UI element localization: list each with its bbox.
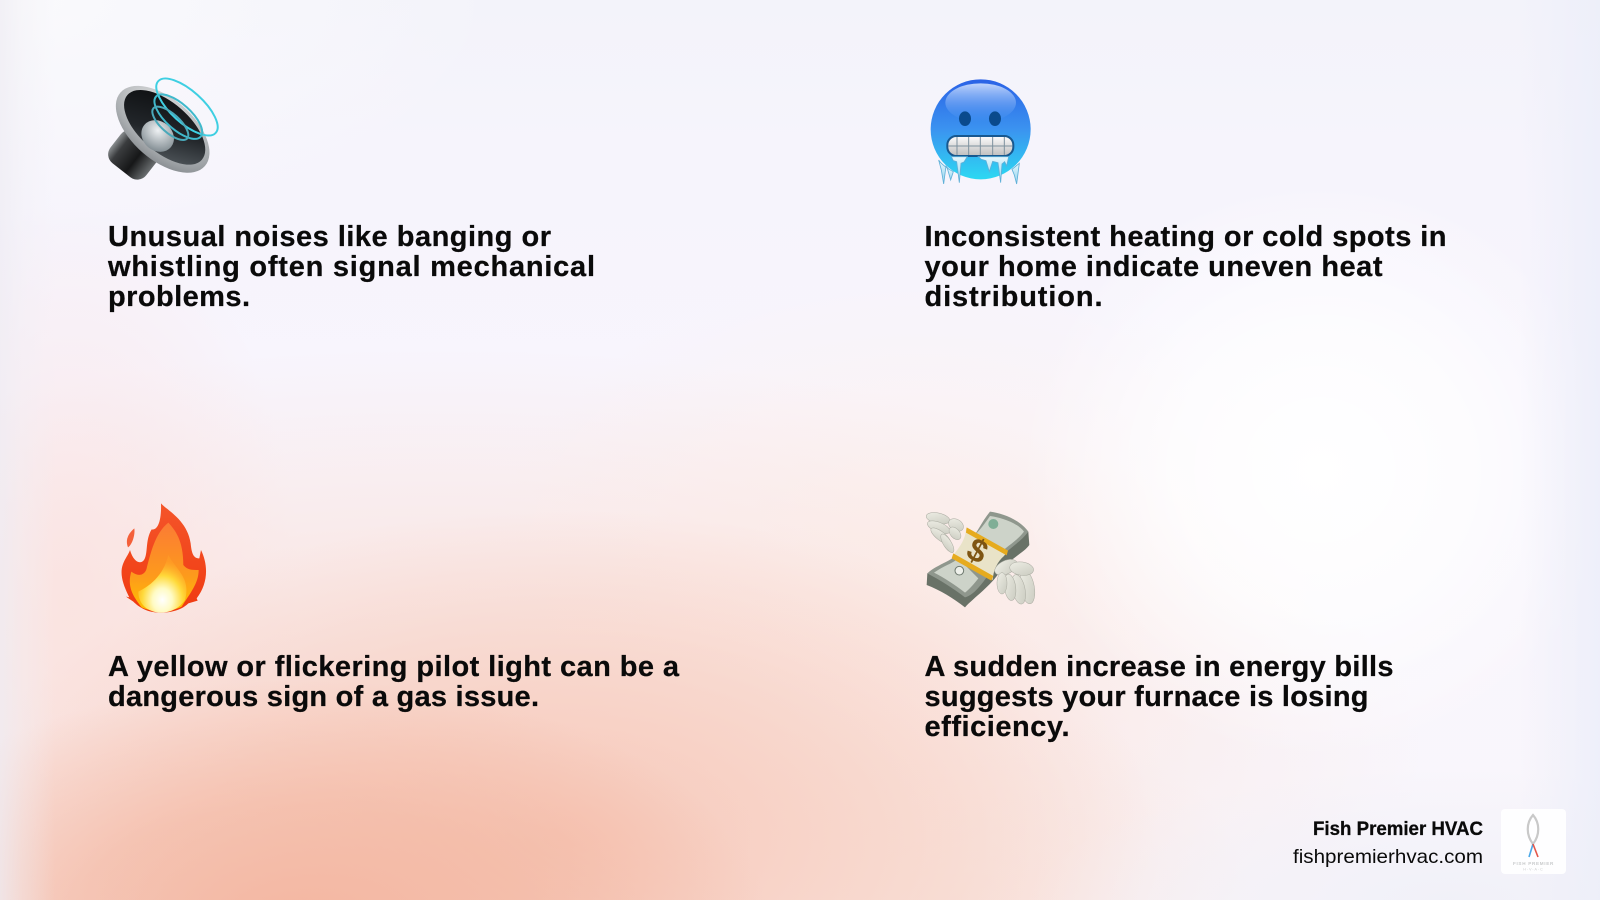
footer: brand name and website: Fish Premier HVAC	[1313, 819, 1483, 840]
panel: energy bills	[924, 511, 1394, 743]
icon: flame	[122, 503, 206, 613]
icon: money with wings: $	[961, 530, 994, 571]
text: unusual noises: whistling often signal mechanical	[107, 251, 595, 283]
logo: Fish Premier HVAC: H-V-A-C	[1523, 868, 1544, 872]
footer: brand name and website	[1293, 819, 1483, 868]
text: pilot light: dangerous sign of a gas issue.	[108, 681, 539, 713]
text: pilot light: A yellow or flickering pilot light can be a	[108, 651, 680, 683]
text: inconsistent heating	[924, 221, 1446, 313]
icon: money with wings	[925, 511, 1037, 607]
text: energy bills: efficiency.	[924, 711, 1070, 743]
text: unusual noises	[107, 221, 595, 313]
icon: speaker	[100, 69, 226, 189]
logo: Fish Premier HVAC: FISH PREMIER	[1513, 861, 1554, 866]
panel: pilot light	[108, 503, 680, 713]
footer: brand name and website: fishpremierhvac.com	[1293, 846, 1483, 868]
text: unusual noises: Unusual noises like banging or	[108, 221, 551, 253]
text: inconsistent heating: your home indicate uneven heat	[924, 251, 1383, 283]
panel: inconsistent heating	[924, 79, 1446, 313]
panel: unusual noises	[100, 69, 595, 313]
text: inconsistent heating: distribution.	[924, 281, 1102, 313]
text: energy bills	[924, 651, 1394, 743]
icon: freezing face	[931, 79, 1031, 184]
logo: Fish Premier HVAC	[1501, 809, 1566, 874]
text: energy bills: suggests your furnace is losing	[924, 681, 1368, 713]
text: pilot light	[108, 651, 680, 713]
text: unusual noises: problems.	[108, 281, 250, 313]
text: inconsistent heating: Inconsistent heating or cold spots in	[924, 221, 1446, 253]
text: energy bills: A sudden increase in energy bills	[924, 651, 1394, 683]
